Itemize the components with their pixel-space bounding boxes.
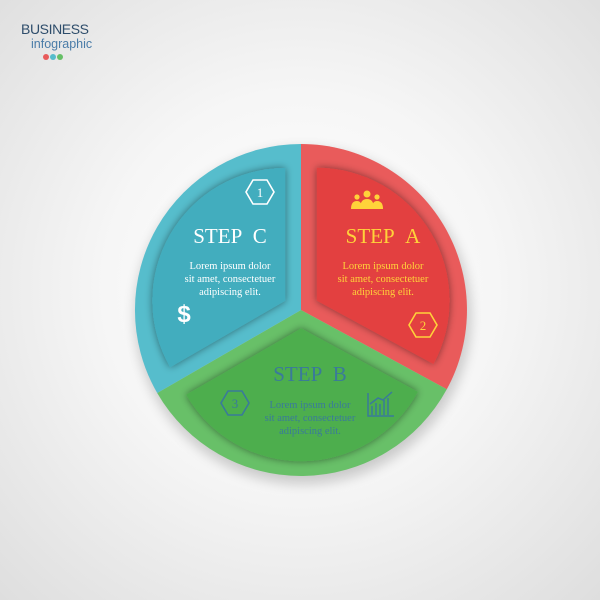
step B text: sit amet, consectetuer: [265, 413, 356, 424]
step C text: sit amet, consectetuer: [185, 274, 276, 285]
segment: step C (blue): [135, 144, 301, 393]
step A text: Lorem ipsum dolor: [342, 261, 424, 272]
step A text: sit amet, consectetuer: [338, 274, 429, 285]
hexagon badge 3: 3: [232, 396, 238, 411]
step B text: Lorem ipsum dolor: [269, 400, 351, 411]
logo dots: [43, 54, 63, 60]
step C text: [185, 224, 276, 298]
segment: step B (green): [157, 310, 447, 476]
step B text: [265, 362, 356, 437]
step C text: STEP C: [193, 224, 267, 248]
step A text: adipiscing elit.: [352, 287, 414, 298]
hexagon badge 1: [246, 180, 274, 204]
hexagon badge 1: 1: [257, 185, 263, 200]
step A text: [338, 224, 429, 298]
logo title: BUSINESS: [21, 21, 89, 37]
segment: step A (red): [301, 144, 467, 389]
hexagon badge 2: 2: [420, 318, 426, 333]
step B text: STEP B: [273, 362, 347, 386]
hexagon badge 3: [221, 391, 249, 415]
logo: business infographic: [21, 21, 92, 60]
logo subtitle: infographic: [31, 37, 92, 51]
step B text: adipiscing elit.: [279, 426, 341, 437]
icon: dollar: $: [177, 301, 191, 328]
step A text: STEP A: [346, 224, 421, 248]
hexagon badge 2: [409, 313, 437, 337]
icon: people: [351, 190, 383, 209]
step C text: Lorem ipsum dolor: [189, 261, 271, 272]
step C text: adipiscing elit.: [199, 287, 261, 298]
icon: bar chart: [368, 392, 394, 416]
